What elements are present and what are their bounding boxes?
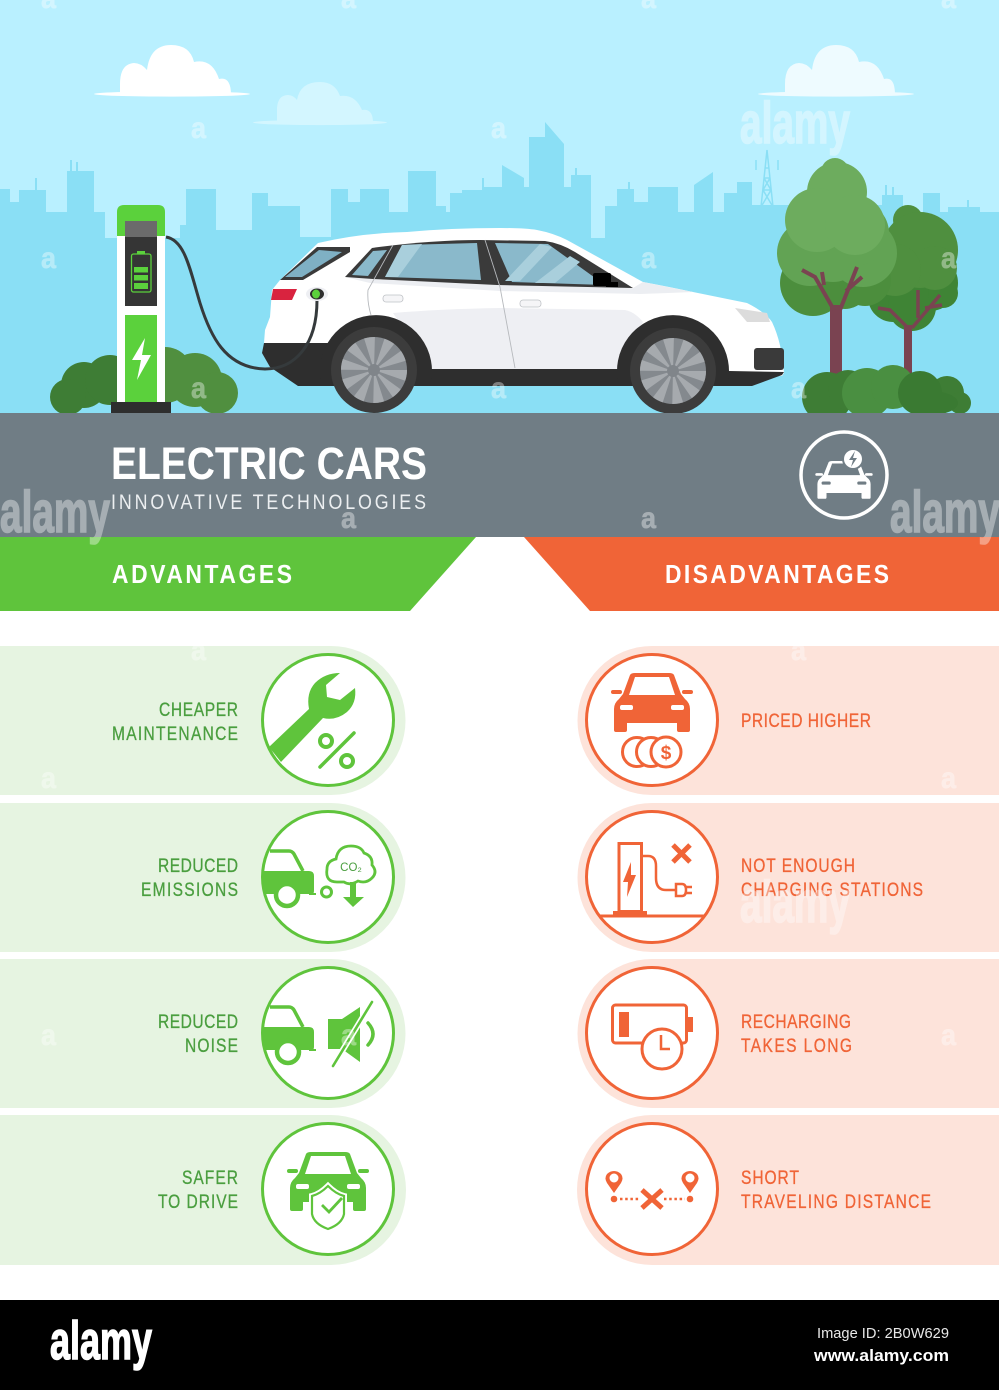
banner: disadvantages: DISADVANTAGES xyxy=(665,561,889,589)
clouds xyxy=(94,45,914,125)
watermarks: a xyxy=(191,372,206,405)
charger battery display xyxy=(132,251,151,292)
watermarks: a xyxy=(491,372,506,405)
icon: charging post and unplugged cable xyxy=(600,844,705,916)
car lower trim xyxy=(262,343,784,386)
row: cheaper maintenance: MAINTENANCE xyxy=(112,723,238,744)
watermarks: a xyxy=(941,1019,956,1052)
icon: car and muted speaker xyxy=(263,1002,373,1066)
door lines xyxy=(368,240,515,368)
icon: low battery and clock xyxy=(612,1005,693,1069)
row: reduced emissions: EMISSIONS xyxy=(141,879,238,900)
watermarks: a xyxy=(191,112,206,145)
icon: car and coins: $ xyxy=(661,743,672,764)
front wheel xyxy=(630,328,716,414)
charging cable and plug xyxy=(166,237,328,369)
watermarks: a xyxy=(941,762,956,795)
watermarks: a xyxy=(41,242,56,275)
subtitle: INNOVATIVE TECHNOLOGIES xyxy=(111,491,426,514)
footer logo: alamy xyxy=(50,1311,152,1371)
row: priced higher xyxy=(578,646,999,795)
electric car xyxy=(262,228,784,414)
watermarks: a xyxy=(491,634,506,667)
icon: electric car badge xyxy=(801,432,887,518)
charger lightning bolt xyxy=(132,338,151,380)
icon: wrench and percent xyxy=(269,673,355,767)
row: not enough charging stations: CHARGING STATIONS xyxy=(741,879,923,900)
watermarks: a xyxy=(41,762,56,795)
charging station xyxy=(111,205,171,413)
watermarks: a xyxy=(791,634,806,667)
header band xyxy=(0,413,999,537)
rear wheel xyxy=(331,327,417,413)
icon: car and co2 cloud xyxy=(263,846,375,907)
watermarks: a xyxy=(641,242,656,275)
watermarks: a xyxy=(191,634,206,667)
row: reduced emissions xyxy=(0,803,406,952)
footer image id: Image ID: 2B0W629 xyxy=(817,1325,949,1342)
row: not enough charging stations xyxy=(578,803,999,952)
row: not enough charging stations: NOT ENOUGH xyxy=(741,855,855,876)
bushes right xyxy=(802,365,971,422)
row: cheaper maintenance xyxy=(0,646,406,795)
banner: advantages xyxy=(0,537,476,611)
rear window xyxy=(280,247,350,280)
icon: car with shield xyxy=(287,1152,369,1229)
row: reduced noise: NOISE xyxy=(185,1035,238,1056)
banner: advantages: ADVANTAGES xyxy=(112,561,292,589)
watermarks: a xyxy=(341,1019,356,1052)
row: recharging takes long: TAKES LONG xyxy=(741,1035,852,1056)
icon: car and coins xyxy=(611,673,693,767)
row: priced higher: PRICED HIGHER xyxy=(741,710,871,731)
icon: route with cross xyxy=(606,1171,698,1208)
title: ELECTRIC CARS xyxy=(111,438,427,489)
row: cheaper maintenance: CHEAPER xyxy=(159,699,238,720)
icon: car and co2 cloud: CO₂ xyxy=(340,862,362,874)
tail light xyxy=(271,289,297,300)
watermarks xyxy=(0,0,999,1052)
watermarks: a xyxy=(341,502,356,535)
watermarks: a xyxy=(641,502,656,535)
row: reduced noise: REDUCED xyxy=(158,1011,238,1032)
tree: rear dark tree xyxy=(868,205,958,375)
banner: disadvantages xyxy=(524,537,999,611)
watermarks: a xyxy=(941,242,956,275)
row: short traveling distance xyxy=(577,1115,999,1265)
city skyline xyxy=(0,122,999,413)
row: recharging takes long: RECHARGING xyxy=(741,1011,851,1032)
watermarks: alamy xyxy=(740,91,850,156)
row: recharging takes long xyxy=(578,959,999,1108)
watermarks: a xyxy=(791,372,806,405)
door handles xyxy=(383,295,541,307)
row: reduced emissions: REDUCED xyxy=(158,855,238,876)
front grille xyxy=(754,348,784,370)
sky background xyxy=(0,0,999,414)
watermarks: a xyxy=(491,112,506,145)
row: short traveling distance: SHORT xyxy=(741,1167,799,1188)
bushes left xyxy=(50,347,238,415)
footer url: www.alamy.com xyxy=(813,1347,949,1365)
headlight xyxy=(735,308,770,322)
tree: front light tree xyxy=(777,158,897,383)
watermarks: alamy xyxy=(740,870,850,935)
row: safer to drive: TO DRIVE xyxy=(158,1191,238,1212)
side windows xyxy=(345,240,633,288)
row: short traveling distance: TRAVELING DISTANCE xyxy=(741,1191,931,1212)
watermarks: a xyxy=(41,1019,56,1052)
watermarks: alamy xyxy=(0,480,110,545)
footer bar xyxy=(0,1300,999,1390)
row: safer to drive xyxy=(0,1115,406,1265)
row: safer to drive: SAFER xyxy=(182,1167,238,1188)
row: reduced noise xyxy=(0,959,406,1108)
